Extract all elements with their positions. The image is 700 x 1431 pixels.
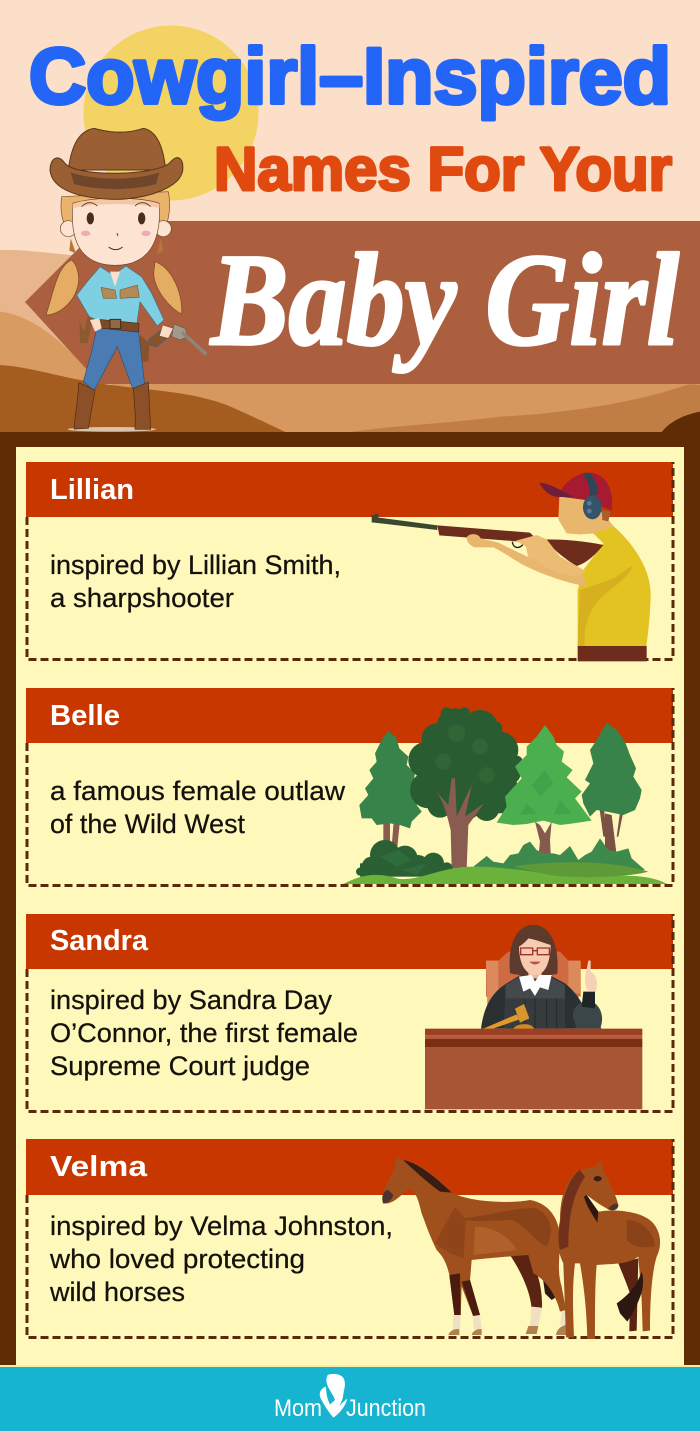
footer bar (0, 1365, 700, 1431)
card: Sandra (26, 914, 673, 1112)
description: Velma: inspired by Velma Johnston, (50, 1211, 393, 1241)
description: Velma: who loved protecting (49, 1244, 305, 1274)
card: Velma (26, 1139, 673, 1338)
page frame (0, 432, 700, 1368)
description: Sandra: O’Connor, the first female (50, 1018, 358, 1048)
header background (0, 0, 700, 433)
description: Belle: a famous female outlaw (50, 776, 346, 806)
description: Lillian: a sharpshooter (50, 583, 234, 613)
cowgirl illustration (46, 128, 205, 432)
icon: sharpshooter with rifle (370, 473, 651, 661)
description: Belle: of the Wild West (50, 809, 245, 839)
icon: trees on a hill (343, 707, 667, 884)
card header: Velma (26, 1139, 673, 1195)
description: Velma: wild horses (49, 1277, 185, 1307)
desert dunes (0, 250, 700, 433)
card header: Belle (26, 688, 673, 743)
name: Belle: Belle (50, 700, 120, 732)
sun (84, 26, 258, 200)
title line 2: Names For Your (214, 135, 672, 203)
name: Sandra: Sandra (50, 925, 149, 957)
icon: judge at bench (425, 925, 642, 1109)
icon: two horses (382, 1157, 660, 1339)
icon: MomJunction mother and child (320, 1374, 347, 1418)
name: Lillian: Lillian (50, 474, 134, 506)
banner arrow (25, 221, 700, 384)
description: Lillian: inspired by Lillian Smith, (50, 550, 341, 580)
footer bar: Junction (346, 1395, 426, 1422)
name: Velma: Velma (50, 1151, 148, 1183)
description: Sandra: inspired by Sandra Day (50, 985, 332, 1015)
card: Lillian (26, 462, 673, 660)
card header: Sandra (26, 914, 673, 969)
description: Sandra: Supreme Court judge (50, 1051, 310, 1081)
logo wordmark: Mom (274, 1395, 322, 1422)
card: Belle (26, 688, 673, 886)
card header: Lillian (26, 462, 673, 517)
title line 1: Cowgirl–Inspired (29, 31, 671, 120)
